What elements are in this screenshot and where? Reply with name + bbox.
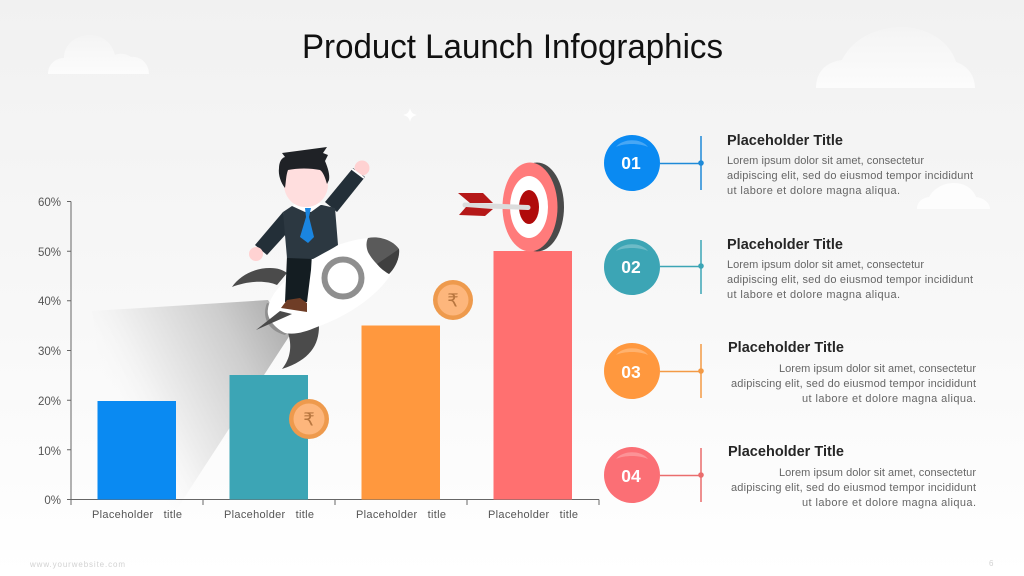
list item 03 (604, 340, 976, 405)
number badge (604, 447, 660, 503)
rocket nose shade (377, 249, 399, 274)
connector (660, 344, 701, 398)
man leg (285, 254, 312, 302)
title: Product Launch Infographics (302, 28, 723, 66)
icon: rupee coin lower: ₹ (303, 410, 315, 430)
body text (731, 467, 976, 509)
y axis labels: 20% (38, 396, 61, 408)
cloud: top left (48, 35, 149, 74)
man torso (283, 205, 338, 259)
cloud: right small (917, 183, 990, 209)
footer website: www.yourwebsite.com (29, 560, 125, 569)
body text: adipiscing elit, sed do eiusmod tempor incididunt (727, 170, 973, 182)
heading: Placeholder Title (727, 237, 843, 253)
man tie (300, 208, 314, 243)
man hair (279, 147, 329, 188)
body text: adipiscing elit, sed do eiusmod tempor incididunt (727, 274, 973, 286)
illustration: businessman on rocket (232, 147, 399, 369)
body text: ut labore et dolore magna aliqua. (802, 497, 976, 509)
man shoe (281, 298, 307, 312)
man right hand (354, 160, 370, 176)
y axis labels: 50% (38, 247, 61, 259)
body text: ut labore et dolore magna aliqua. (727, 185, 900, 197)
y axis labels: 40% (38, 296, 61, 308)
body text (727, 155, 973, 197)
y axis labels (38, 197, 61, 507)
icon: rupee coin lower (289, 399, 329, 439)
icon: target with arrow (458, 162, 564, 252)
body text: Lorem ipsum dolor sit amet, consectetur (779, 363, 976, 375)
category labels: Placeholder title (356, 509, 446, 521)
icon: rupee coin upper: ₹ (447, 290, 459, 312)
rocket body (268, 238, 391, 334)
heading: Placeholder Title (728, 444, 844, 460)
rocket nose (366, 237, 399, 274)
rocket bottom fin (282, 326, 319, 369)
rocket window (324, 260, 362, 296)
body text: adipiscing elit, sed do eiusmod tempor incididunt (731, 482, 976, 494)
list item 02: 02 (621, 257, 641, 277)
rocket exhaust beam (92, 300, 290, 572)
y axis labels: 0% (44, 495, 61, 507)
heading: Placeholder Title (727, 133, 843, 149)
body text: adipiscing elit, sed do eiusmod tempor incididunt (731, 378, 976, 390)
y axis labels: 30% (38, 346, 61, 358)
sparkle star (403, 108, 417, 122)
list item 02 (604, 237, 973, 301)
rocket top fin (232, 268, 287, 287)
cloud: top right (816, 27, 975, 88)
icon: rupee coin upper (433, 280, 473, 320)
connector (660, 136, 701, 190)
body text (731, 363, 976, 405)
body text: ut labore et dolore magna aliqua. (802, 393, 976, 405)
category labels: Placeholder title (488, 509, 578, 521)
list item 03: 03 (621, 362, 641, 382)
rocket tail ring (265, 303, 295, 335)
list item 01: 01 (621, 153, 641, 173)
number badge (604, 343, 660, 399)
category labels: Placeholder title (224, 509, 314, 521)
man left hand (249, 247, 263, 261)
body text: Lorem ipsum dolor sit amet, consectetur (727, 259, 924, 271)
connector (660, 448, 701, 502)
man collar (292, 201, 322, 212)
connector (660, 240, 701, 294)
category labels: Placeholder title (92, 509, 182, 521)
page number: 6 (989, 559, 994, 568)
bar: orange 35% (362, 326, 440, 500)
man right cuff (352, 169, 364, 178)
list item 01 (604, 133, 973, 197)
man face (284, 168, 328, 207)
bar: teal 25% (230, 375, 308, 500)
list item 04: 04 (621, 466, 641, 486)
list item 04 (604, 444, 976, 509)
category labels (92, 509, 578, 521)
bar: red 50% (494, 251, 572, 500)
body text (727, 259, 973, 301)
body text: Lorem ipsum dolor sit amet, consectetur (779, 467, 976, 479)
y axis labels: 60% (38, 197, 61, 209)
number badge (604, 239, 660, 295)
number badge (604, 135, 660, 191)
exhaust streak (256, 311, 292, 330)
man right arm (325, 168, 365, 212)
bar: blue 20% (98, 401, 176, 500)
body text: Lorem ipsum dolor sit amet, consectetur (727, 155, 924, 167)
bar chart (38, 197, 599, 521)
y axis labels: 10% (38, 446, 61, 458)
man left arm (255, 212, 287, 255)
heading: Placeholder Title (728, 340, 844, 356)
axes (67, 202, 599, 505)
body text: ut labore et dolore magna aliqua. (727, 289, 900, 301)
